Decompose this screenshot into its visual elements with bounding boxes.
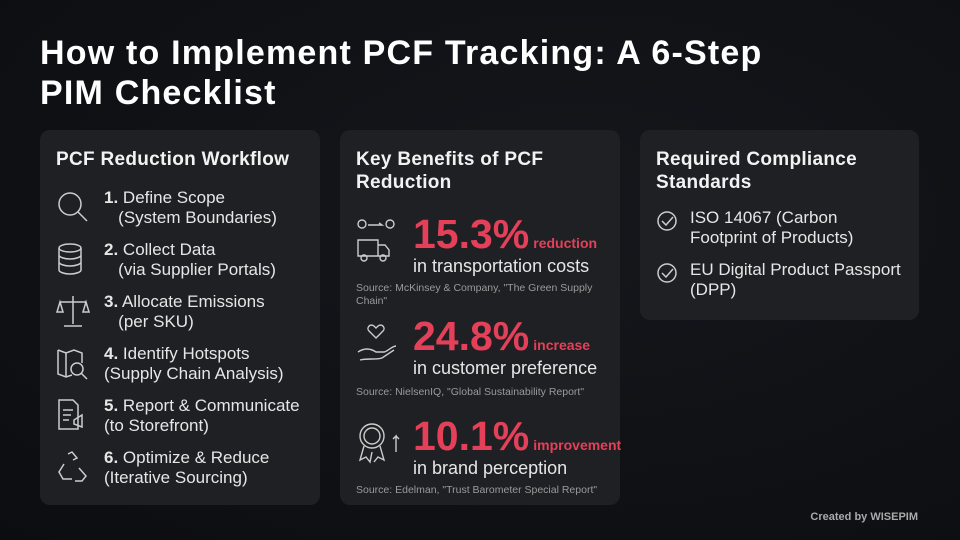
standard 1: [657, 208, 853, 247]
heading: workflow: PCF Reduction Workflow: [56, 149, 289, 170]
step 5: 5. Report & Communicate: [104, 396, 300, 415]
step 3: [56, 292, 265, 331]
step 6: [58, 448, 269, 487]
step 4: (Supply Chain Analysis): [104, 364, 284, 383]
step 2: 2. Collect Data: [104, 240, 216, 259]
standard 2: EU Digital Product Passport: [690, 260, 901, 279]
step 6: 6. Optimize & Reduce: [104, 448, 269, 467]
benefit 3: in brand perception: [413, 458, 567, 478]
heading: benefits: Key Benefits of PCF: [356, 149, 543, 170]
benefit 2: [356, 313, 597, 398]
step 6: (Iterative Sourcing): [104, 468, 248, 487]
step 1: [58, 188, 277, 227]
step 4: 4. Identify Hotspots: [104, 344, 250, 363]
step 2: (via Supplier Portals): [118, 260, 276, 279]
heading: compliance: Required Compliance: [656, 149, 857, 170]
step 1: (System Boundaries): [118, 208, 277, 227]
panel: compliance: [640, 130, 919, 320]
step 1: 1. Define Scope: [104, 188, 225, 207]
step 2: [58, 240, 276, 279]
step 5: [58, 396, 300, 435]
step 4: [57, 344, 284, 383]
benefit 2: Source: NielsenIQ, "Global Sustainability Report": [356, 386, 584, 398]
step 3: 3. Allocate Emissions: [104, 292, 265, 311]
heading: benefits: Reduction: [356, 172, 452, 193]
benefit 1: in transportation costs: [413, 256, 589, 276]
benefit 3: [356, 413, 621, 496]
step 3: (per SKU): [118, 312, 194, 331]
credit: Created by WISEPIM: [810, 511, 918, 523]
benefit 2: 24.8% increase: [413, 313, 590, 359]
benefit 3: Source: Edelman, "Trust Barometer Special Report": [356, 484, 597, 496]
panel: workflow: [40, 130, 320, 505]
benefit 1: 15.3% reduction: [413, 211, 597, 257]
standard 2: (DPP): [690, 280, 736, 299]
standard 1: Footprint of Products): [690, 228, 853, 247]
benefit 1: Source: McKinsey & Company, "The Green Supply Chain": [356, 282, 592, 307]
heading: compliance: [656, 149, 857, 193]
step 5: (to Storefront): [104, 416, 209, 435]
benefit 3: 10.1% improvement: [413, 413, 621, 459]
standard 2: [657, 260, 901, 299]
benefit 2: in customer preference: [413, 358, 597, 378]
heading: benefits: [356, 149, 543, 193]
standard 1: ISO 14067 (Carbon: [690, 208, 837, 227]
title: How to Implement PCF Tracking: A 6-Step: [40, 34, 762, 72]
panel: benefits: [340, 130, 620, 505]
title: [40, 34, 762, 112]
benefit 1: [356, 211, 597, 307]
heading: compliance: Standards: [656, 172, 752, 193]
title: PIM Checklist: [40, 74, 277, 112]
